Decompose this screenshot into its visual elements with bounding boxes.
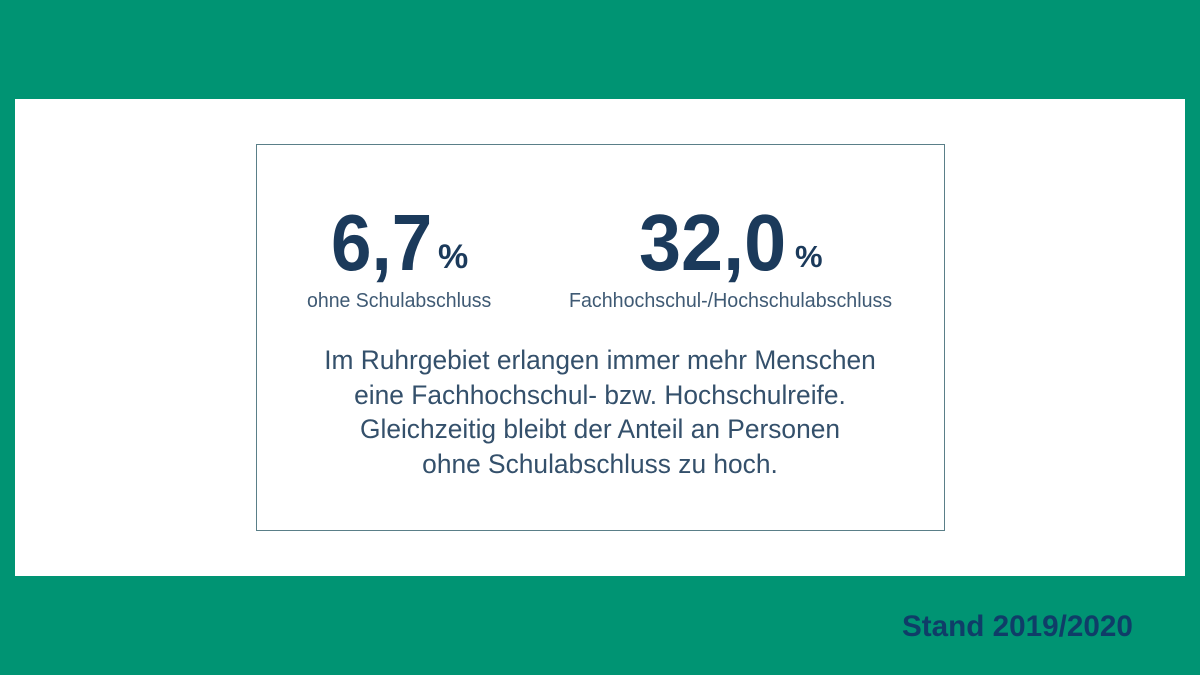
label: ohne Schulabschluss: ohne Schulabschluss <box>307 290 491 312</box>
number 32,0: 32,0 <box>639 198 786 287</box>
percent sign: % <box>438 238 468 276</box>
body text <box>324 345 876 479</box>
date note: Stand 2019/2020 <box>902 610 1133 643</box>
body text: eine Fachhochschul- bzw. Hochschulreife. <box>354 380 846 410</box>
number 6,7: 6,7 <box>331 198 432 287</box>
statistic: 6,7 % <box>331 198 468 287</box>
body text: ohne Schulabschluss zu hoch. <box>422 449 778 479</box>
framed info box <box>256 144 945 531</box>
white panel <box>15 99 1185 576</box>
body text: Im Ruhrgebiet erlangen immer mehr Menschen <box>324 345 876 375</box>
label: Fachhochschul-/Hochschulabschluss: Fachhochschul-/Hochschulabschluss <box>569 290 892 312</box>
body text: Gleichzeitig bleibt der Anteil an Personen <box>360 414 840 444</box>
percent sign: % <box>795 239 823 274</box>
statistic: 32,0 % <box>639 198 823 287</box>
